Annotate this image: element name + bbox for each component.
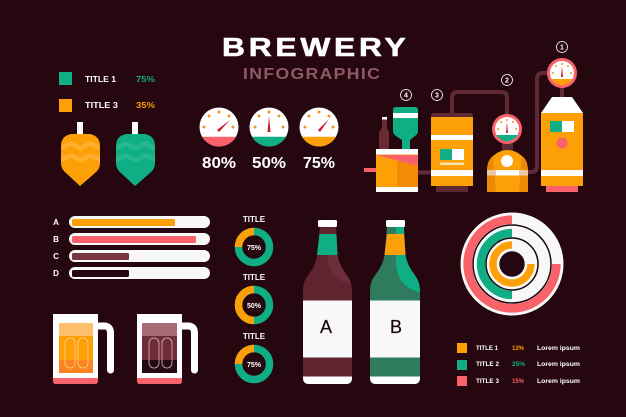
donut chart: 50%: 50% — [247, 303, 262, 310]
gauge: 80% — [200, 108, 238, 172]
small bottle — [379, 117, 389, 149]
bottle B: B — [390, 317, 402, 337]
bottle B — [370, 220, 420, 384]
icon: orange beer mug — [53, 314, 110, 384]
legend: hops: 35% — [136, 101, 155, 110]
legend: radial chart: Lorem ipsum — [537, 345, 580, 352]
legend: radial chart: Lorem ipsum — [537, 361, 580, 368]
legend: radial chart: TITLE 1 — [476, 345, 498, 352]
step numbers: 2 — [505, 78, 509, 84]
step numbers: 3 — [435, 92, 439, 100]
legend: radial chart: 12% — [512, 345, 524, 352]
gauge 1 — [547, 58, 577, 88]
legend: radial chart — [457, 343, 580, 386]
tank 1 — [541, 86, 583, 192]
legend: radial chart: 25% — [512, 361, 525, 368]
icon: orange hop — [61, 122, 100, 186]
pipes — [418, 73, 550, 172]
green upside-down bottle — [393, 107, 418, 149]
donut chart: 75% top: 75% — [247, 245, 262, 252]
step numbers: 4 — [404, 92, 408, 100]
tank 4 — [364, 149, 418, 192]
radial chart — [460, 212, 564, 316]
gauge: 50% — [250, 108, 288, 172]
title: BREWERY — [222, 34, 409, 62]
donut chart: 75% bottom: 75% — [247, 362, 262, 369]
gauge 2 — [492, 114, 522, 144]
donut chart: 75% top — [238, 215, 270, 262]
legend: radial chart: 15% — [512, 378, 524, 385]
brewing process diagram — [364, 42, 583, 192]
bar chart: C — [53, 252, 59, 261]
icon: dark beer mug — [137, 314, 194, 384]
legend: radial chart: TITLE 2 — [476, 361, 499, 368]
donut chart: 50%: TITLE — [243, 273, 266, 282]
title: INFOGRAPHIC — [243, 65, 381, 83]
gauge: 75%: 75% — [303, 155, 335, 172]
tank 3 — [431, 113, 473, 192]
donut chart: 75% top: TITLE — [243, 215, 266, 224]
gauge: 50%: 50% — [252, 155, 286, 172]
icon: green hop — [116, 122, 155, 186]
tank 2 — [487, 143, 528, 192]
donut chart: 50% — [238, 273, 270, 320]
legend: hops — [59, 72, 155, 112]
bar chart: B — [53, 235, 59, 244]
legend: hops: TITLE 1 — [85, 75, 117, 84]
title — [222, 34, 409, 83]
bottle A — [303, 220, 352, 384]
step numbers — [400, 42, 568, 100]
step numbers: 1 — [560, 44, 564, 52]
legend: hops: TITLE 3 — [85, 101, 119, 110]
bottle A: A — [320, 317, 332, 337]
donut chart: 75% bottom — [238, 332, 270, 380]
legend: radial chart: Lorem ipsum — [537, 378, 580, 385]
bar chart: A — [53, 218, 59, 227]
gauge: 80%: 80% — [202, 155, 236, 172]
legend: radial chart: TITLE 3 — [476, 378, 499, 385]
legend: hops: 75% — [136, 75, 155, 84]
gauge: 75% — [300, 108, 338, 172]
bar chart: D — [53, 269, 59, 278]
donut chart: 75% bottom: TITLE — [243, 332, 266, 341]
bar chart — [53, 216, 210, 279]
